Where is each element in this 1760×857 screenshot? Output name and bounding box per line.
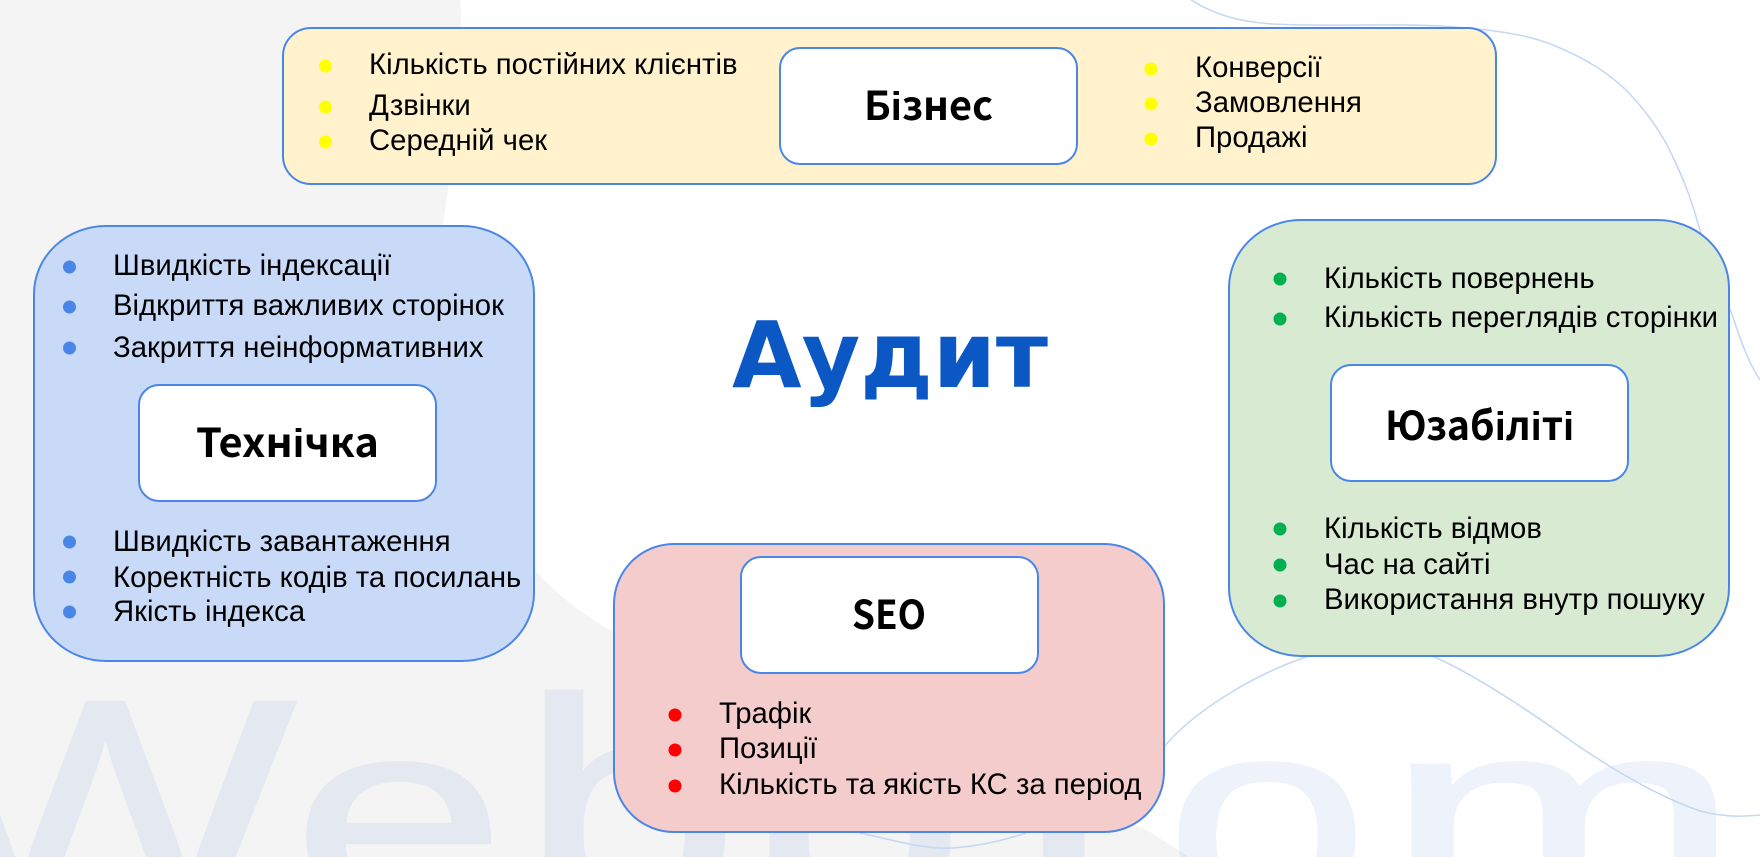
business label: Бізнес [864, 74, 993, 132]
usability label: Юзабіліті [1385, 394, 1574, 452]
seo bullets: Трафік [719, 697, 811, 730]
technical bullets bottom: Якість індекса [113, 595, 306, 628]
usability bullets bottom: Кількість відмов [1324, 512, 1542, 545]
technical bullets bottom [63, 525, 521, 628]
business bullets left: Кількість постійних клієнтів [369, 48, 738, 81]
business label [780, 48, 1077, 164]
business bullets left: Дзвінки [369, 89, 471, 122]
usability bullets top: Кількість переглядів сторінки [1324, 301, 1718, 334]
seo bullets: Кількість та якість КС за період [719, 768, 1142, 801]
usability bullets top: Кількість повернень [1324, 262, 1595, 295]
business bullets right [1144, 51, 1362, 154]
business bullets right: Замовлення [1195, 86, 1362, 119]
usability bullets top [1274, 262, 1718, 334]
panel: seo [614, 544, 1164, 832]
technical bullets top: Відкриття важливих сторінок [113, 289, 504, 322]
technical bullets top: Швидкість індексації [113, 249, 391, 282]
technical bullets bottom: Коректність кодів та посилань [113, 561, 521, 594]
technical bullets bottom: Швидкість завантаження [113, 525, 451, 558]
panel: usability [1229, 220, 1729, 656]
technical label [139, 385, 436, 501]
seo label: SEO [852, 583, 926, 641]
panel: technical [34, 226, 534, 661]
usability bullets bottom [1274, 512, 1705, 616]
business bullets right: Конверсії [1195, 51, 1322, 84]
title: Аудит [732, 302, 1048, 409]
seo bullets: Позиції [719, 732, 817, 765]
watermark [0, 690, 1716, 857]
panel: business [283, 28, 1496, 184]
business bullets left: Середній чек [369, 124, 547, 157]
technical label: Технічка [196, 411, 379, 469]
seo bullets [668, 697, 1142, 801]
technical bullets top [63, 249, 504, 364]
seo label [741, 557, 1038, 673]
business bullets left [319, 48, 738, 157]
usability bullets bottom: Використання внутр пошуку [1324, 583, 1705, 616]
usability bullets bottom: Час на сайті [1324, 548, 1490, 581]
usability label [1331, 365, 1628, 481]
business bullets right: Продажі [1195, 121, 1308, 154]
technical bullets top: Закриття неінформативних [113, 331, 484, 364]
